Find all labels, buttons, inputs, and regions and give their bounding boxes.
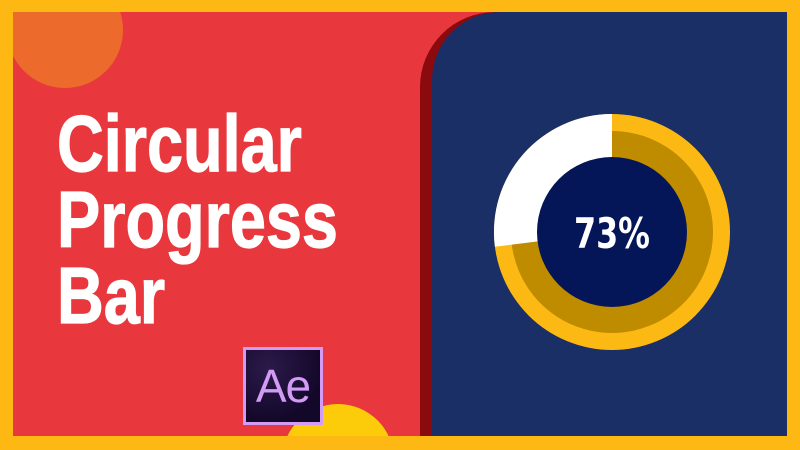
panel shadow: dark red <box>420 12 787 436</box>
value label: 73% <box>574 209 650 258</box>
icon: After Effects logo: Ae <box>256 360 310 412</box>
icon: After Effects logo <box>243 347 323 425</box>
title: Circular <box>57 99 302 188</box>
decorative yellow circle <box>282 404 394 450</box>
title <box>57 99 338 330</box>
panel: navy <box>432 12 787 436</box>
chart: circular progress ring 73% <box>494 114 730 350</box>
remaining 27% white arc <box>494 114 612 247</box>
title: Progress <box>57 175 338 264</box>
decorative orange circle <box>7 0 123 88</box>
